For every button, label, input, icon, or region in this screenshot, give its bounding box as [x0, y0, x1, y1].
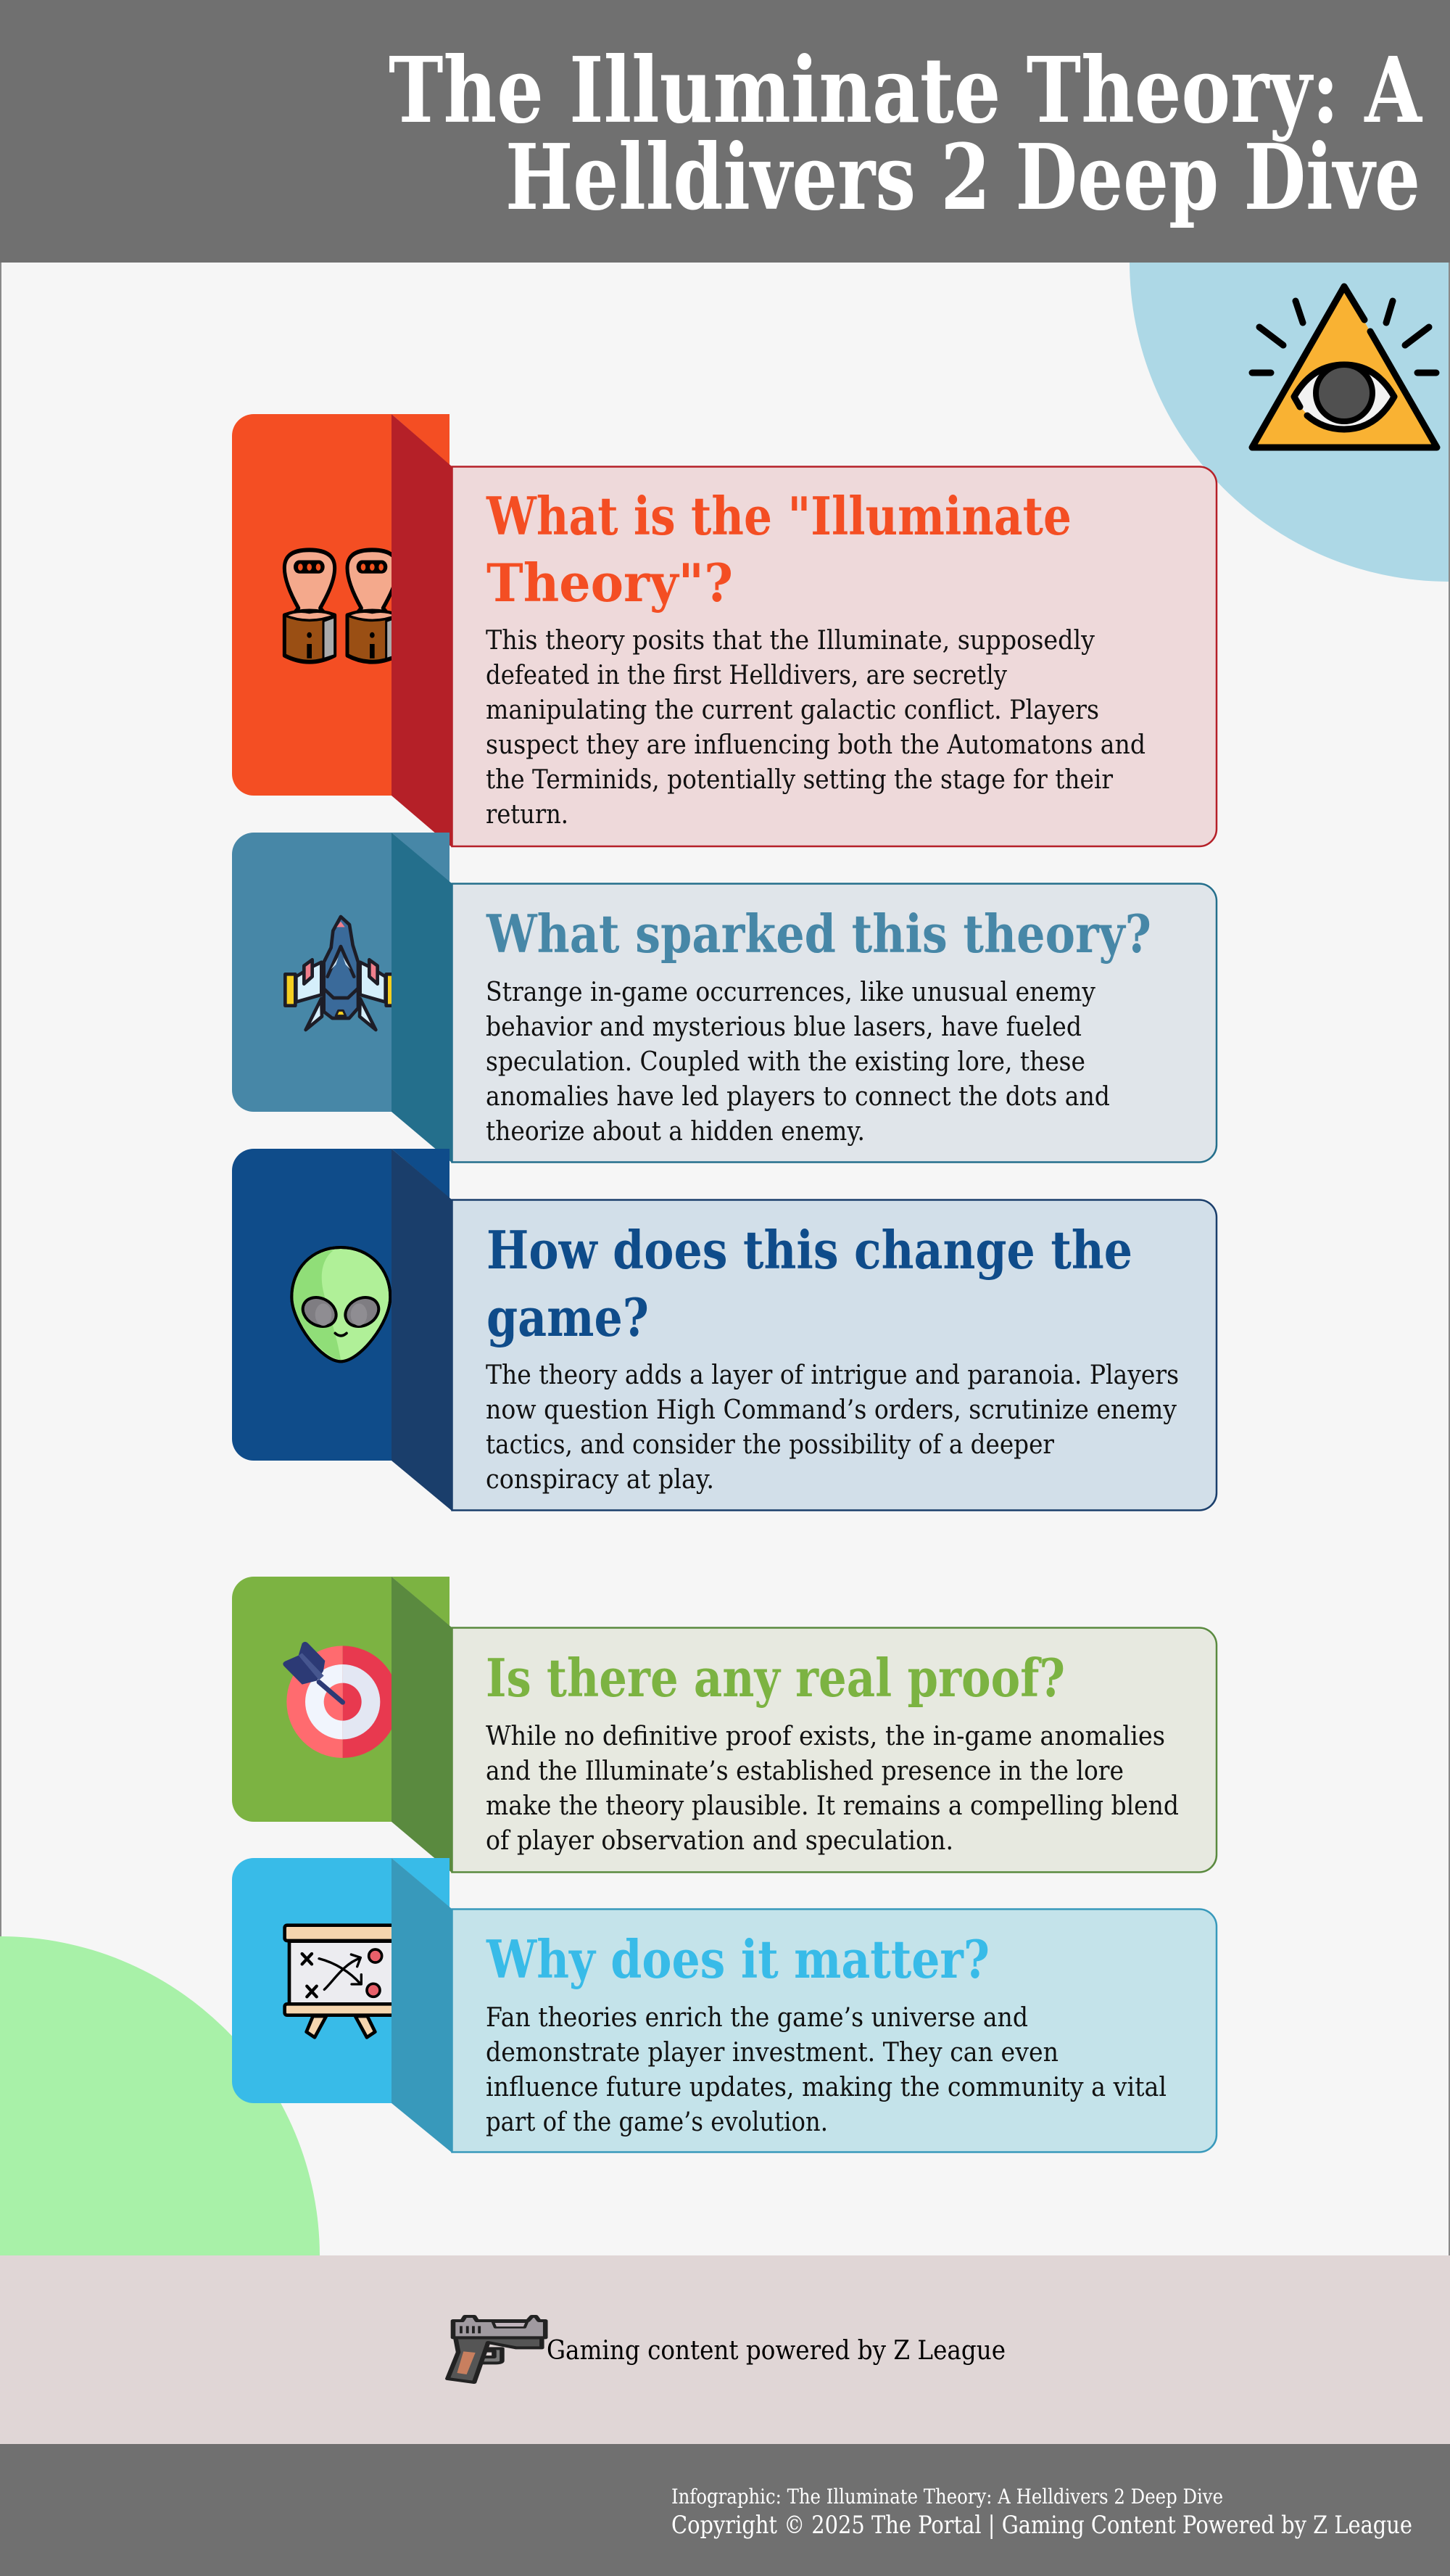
icon: all-seeing eye in triangle: [1252, 286, 1437, 447]
heading: What sparked this theory?: [486, 903, 1151, 965]
footer credit: Infographic: The Illuminate Theory: A Helldivers 2 Deep Dive: [671, 2485, 1223, 2509]
text box: [452, 1627, 1217, 1873]
body text: behavior and mysterious blue lasers, have fueled: [486, 1011, 1082, 1042]
body text: return.: [486, 798, 568, 830]
body text: and the Illuminate’s established presence in the lore: [486, 1755, 1124, 1786]
sponsor band: [0, 2255, 1450, 2444]
body text: [486, 1359, 1179, 1495]
fold: [392, 1149, 452, 1511]
icon: dart target: [283, 1642, 399, 1758]
tab: orange: [232, 414, 450, 796]
panel: how does this change the game: [232, 1149, 1217, 1511]
body text: anomalies have led players to connect the dots and: [486, 1081, 1110, 1112]
icon: twin figures: [284, 550, 397, 662]
body text: suspect they are influencing both the Automatons and: [486, 729, 1146, 760]
body text: speculation. Coupled with the existing lore, these: [486, 1046, 1085, 1077]
body text: [486, 624, 1146, 830]
text box: [452, 1200, 1217, 1510]
decorative circle: blue top right: [1130, 263, 1449, 582]
fold: [392, 414, 452, 847]
fold: [392, 1577, 452, 1873]
body text: [486, 976, 1110, 1147]
fold: [392, 1858, 452, 2152]
body text: tactics, and consider the possibility of a deeper: [486, 1429, 1054, 1460]
body text: This theory posits that the Illuminate, supposedly: [486, 624, 1095, 656]
text box: [452, 467, 1217, 846]
icon: tactics board: [285, 1925, 405, 2037]
heading: [486, 1219, 1132, 1348]
sponsor text: Gaming content powered by Z League: [547, 2336, 1006, 2366]
tab: steel blue: [232, 833, 450, 1112]
body text: Strange in-game occurrences, like unusual enemy: [486, 976, 1095, 1007]
panel: what sparked this theory: [232, 833, 1217, 1163]
body text: manipulating the current galactic conflict. Players: [486, 694, 1099, 725]
body text: make the theory plausible. It remains a compelling blend: [486, 1790, 1179, 1821]
footer band: [0, 2444, 1450, 2576]
body text: While no definitive proof exists, the in-game anomalies: [486, 1720, 1165, 1751]
title: [389, 38, 1423, 231]
body text: [486, 1720, 1179, 1856]
tab: navy: [232, 1149, 450, 1461]
tab: green: [232, 1577, 450, 1822]
body text: theorize about a hidden enemy.: [486, 1115, 865, 1147]
decorative circle: green bottom left: [0, 1936, 320, 2255]
body text: of player observation and speculation.: [486, 1825, 953, 1856]
body text: the Terminids, potentially setting the stage for their: [486, 764, 1113, 795]
body text: influence future updates, making the community a vital: [486, 2071, 1167, 2102]
heading: How does this change the: [486, 1219, 1132, 1281]
text box: [452, 883, 1217, 1162]
body text: demonstrate player investment. They can even: [486, 2036, 1058, 2068]
heading: Is there any real proof?: [486, 1647, 1065, 1709]
body text: The theory adds a layer of intrigue and paranoia. Players: [486, 1359, 1179, 1390]
tab: sky blue: [232, 1858, 450, 2103]
body text: Fan theories enrich the game’s universe and: [486, 2002, 1028, 2033]
heading: What is the "Illuminate: [486, 485, 1072, 547]
header band: [0, 0, 1450, 263]
text box: [452, 1909, 1217, 2152]
panel: is there any real proof: [232, 1577, 1217, 1873]
panel: why does it matter: [232, 1858, 1217, 2152]
icon: pistol: [447, 2316, 545, 2382]
body text: conspiracy at play.: [486, 1464, 714, 1495]
heading: game?: [486, 1287, 649, 1348]
icon: alien head: [291, 1247, 390, 1361]
body text: defeated in the first Helldivers, are secretly: [486, 659, 1007, 690]
heading: Theory"?: [486, 552, 733, 614]
heading: [486, 485, 1072, 614]
fold: [392, 833, 452, 1163]
body text: part of the game’s evolution.: [486, 2106, 828, 2137]
body text: [486, 2002, 1167, 2137]
panel: what is the Illuminate theory: [232, 414, 1217, 847]
heading: Why does it matter?: [486, 1928, 990, 1990]
body text: now question High Command’s orders, scrutinize enemy: [486, 1394, 1177, 1425]
icon: spaceship: [285, 917, 397, 1030]
